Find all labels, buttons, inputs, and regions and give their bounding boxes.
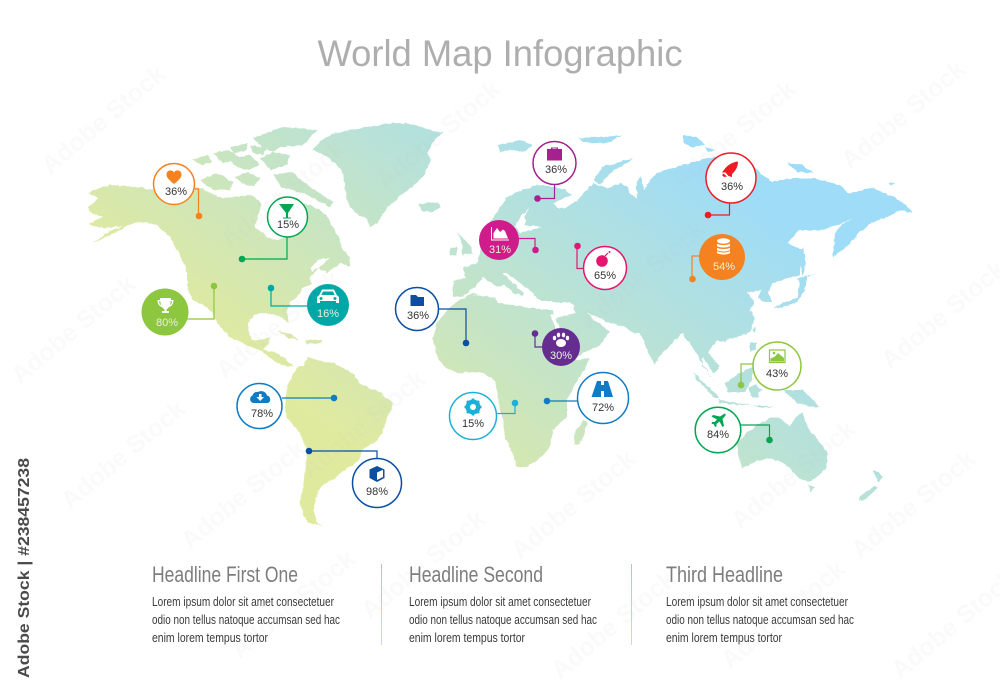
- title: World Map Infographic: [318, 33, 682, 74]
- watermark pattern: Adobe Stock: [356, 505, 491, 625]
- callout: Central Asia 54% database: 54%: [713, 261, 735, 273]
- baltic cut-out: [515, 207, 542, 233]
- icon: gear: [468, 402, 478, 412]
- callout: Canada 15% glass: 15%: [277, 219, 299, 231]
- callout: Argentina 98% cube: 98%: [366, 486, 388, 498]
- callout: Russia 65% bomb: 65%: [594, 270, 616, 282]
- callout: USA 80% trophy: 80%: [156, 317, 178, 329]
- callout: East Africa 72% road: [544, 372, 628, 424]
- callout: Brazil 78% cloud: [237, 384, 337, 428]
- icon: area chart: [492, 227, 509, 240]
- watermark pattern: Adobe Stock: [716, 555, 851, 675]
- callout: Central Africa 15% gear: 15%: [462, 418, 484, 430]
- arctic russian islands: [498, 135, 895, 186]
- column: headline second: Headline Second: [409, 562, 543, 587]
- body text third column: Lorem ipsum dolor sit amet consectetuer: [666, 594, 849, 609]
- tasmania: [808, 485, 815, 492]
- callout: Siberia 36% rocket: [705, 153, 756, 218]
- callout: Australia 84% plane: [695, 407, 773, 453]
- callout: Brazil 78% cloud: 78%: [251, 408, 273, 420]
- body text second column: [409, 594, 597, 645]
- watermark pattern: Adobe Stock: [211, 265, 346, 385]
- body text second column: odio non tellus natoque accumsan sed hac: [409, 612, 597, 627]
- body text second column: enim lorem tempus tortor: [409, 630, 526, 645]
- callout: Scandinavia 36% briefcase: 36%: [545, 164, 567, 176]
- body text third column: [666, 594, 854, 645]
- japan and sakhalin: [773, 247, 817, 308]
- column: third headline: [666, 562, 854, 645]
- body text second column: Lorem ipsum dolor sit amet consectetuer: [409, 594, 592, 609]
- watermark pattern: Adobe Stock: [666, 75, 801, 195]
- callout: Canada 36% heart: [154, 164, 202, 219]
- column: third headline: Third Headline: [666, 562, 783, 587]
- watermark pattern: Adobe Stock: [296, 365, 431, 485]
- red sea cut-out: [550, 314, 576, 354]
- callout: Indonesia 43% image: [738, 342, 801, 390]
- icon: image: [770, 350, 785, 362]
- body text first column: odio non tellus natoque accumsan sed hac: [152, 612, 340, 627]
- callout: Canada 15% glass: [239, 197, 308, 262]
- watermark pattern: Adobe Stock: [176, 435, 311, 555]
- icon: road: [592, 381, 613, 397]
- callout: West Africa 36% folder: 36%: [407, 310, 429, 322]
- callout: USA 16% car: 16%: [317, 308, 339, 320]
- africa: [433, 295, 590, 467]
- icon: trophy: [158, 298, 174, 313]
- icon: plane: [712, 414, 726, 427]
- watermark pattern: Adobe Stock: [506, 445, 641, 565]
- watermark pattern: Adobe Stock: [36, 60, 171, 180]
- callout: Australia 84% plane: 84%: [707, 429, 729, 441]
- body text third column: odio non tellus natoque accumsan sed hac: [666, 612, 854, 627]
- mediterranean cut-out: [460, 273, 575, 313]
- callout: Scandinavia 36% briefcase: [533, 142, 576, 202]
- callout: Siberia 36% rocket: 36%: [721, 181, 743, 193]
- body text first column: enim lorem tempus tortor: [152, 630, 269, 645]
- column: headline first one: Headline First One: [152, 562, 298, 587]
- icon: cloud download: [250, 391, 270, 403]
- watermark pattern: Adobe Stock: [56, 395, 191, 515]
- callout: Indonesia 43% image: 43%: [766, 368, 788, 380]
- icon: paw: [553, 333, 569, 347]
- callout: USA 16% car: [268, 284, 349, 326]
- south east asia islands: [693, 327, 775, 408]
- watermark pattern: Adobe Stock: [216, 135, 351, 255]
- adobe stock vertical credit: Adobe Stock | #238457238: [16, 458, 33, 678]
- madagascar: [574, 420, 587, 445]
- callout: USA 80% trophy: [142, 283, 217, 336]
- icon: rocket: [722, 162, 738, 177]
- callout: Canada 36% heart: 36%: [165, 186, 187, 198]
- icon: cocktail glass: [279, 204, 294, 218]
- watermark pattern: Adobe Stock: [6, 270, 141, 390]
- callout: Europe 31% chart: [479, 220, 539, 260]
- australia: [737, 412, 828, 482]
- callout: Europe 31% chart: 31%: [489, 244, 511, 256]
- great lakes cut-out: [310, 258, 330, 272]
- watermark pattern: Adobe Stock: [226, 545, 361, 665]
- new zealand: [859, 470, 883, 501]
- eurasia: [453, 155, 913, 382]
- watermark pattern: Adobe Stock: [836, 55, 971, 175]
- world map: [87, 123, 913, 526]
- iceland: [418, 202, 441, 212]
- column: headline second: [409, 562, 597, 645]
- body text third column: enim lorem tempus tortor: [666, 630, 783, 645]
- icon: cube: [370, 466, 384, 482]
- arctic islands of canada: [192, 127, 333, 207]
- watermark pattern: Adobe Stock: [546, 565, 681, 685]
- caribbean islands: [277, 331, 322, 344]
- callout: Argentina 98% cube: [306, 448, 402, 508]
- icon: heart: [166, 170, 182, 184]
- icon: briefcase: [547, 148, 562, 160]
- callout: West Africa 36% folder: [396, 288, 469, 346]
- callout: Sudan 30% paw: 30%: [550, 350, 572, 362]
- callout: Russia 65% bomb: [574, 243, 626, 290]
- callout: Central Asia 54% database: [689, 234, 745, 282]
- icon: bomb: [596, 255, 608, 267]
- callout: Sudan 30% paw: [532, 328, 580, 366]
- south america: [285, 357, 393, 526]
- icon: folder: [410, 295, 424, 306]
- greenland: [312, 123, 443, 227]
- north america: [87, 185, 350, 367]
- watermark pattern: Adobe Stock: [576, 215, 711, 335]
- icon: car: [317, 290, 339, 303]
- body text first column: [152, 594, 340, 645]
- icon: database: [717, 238, 730, 254]
- column: headline first one: [152, 562, 340, 645]
- callout: Central Africa 15% gear: [450, 392, 518, 440]
- new guinea: [783, 390, 820, 407]
- united kingdom and ireland: [450, 233, 473, 256]
- callout: East Africa 72% road: 72%: [592, 402, 614, 414]
- watermark pattern: Adobe Stock: [846, 445, 981, 565]
- body text first column: Lorem ipsum dolor sit amet consectetuer: [152, 594, 335, 609]
- watermark pattern: Adobe Stock: [726, 415, 861, 535]
- watermark pattern: Adobe Stock: [371, 75, 506, 195]
